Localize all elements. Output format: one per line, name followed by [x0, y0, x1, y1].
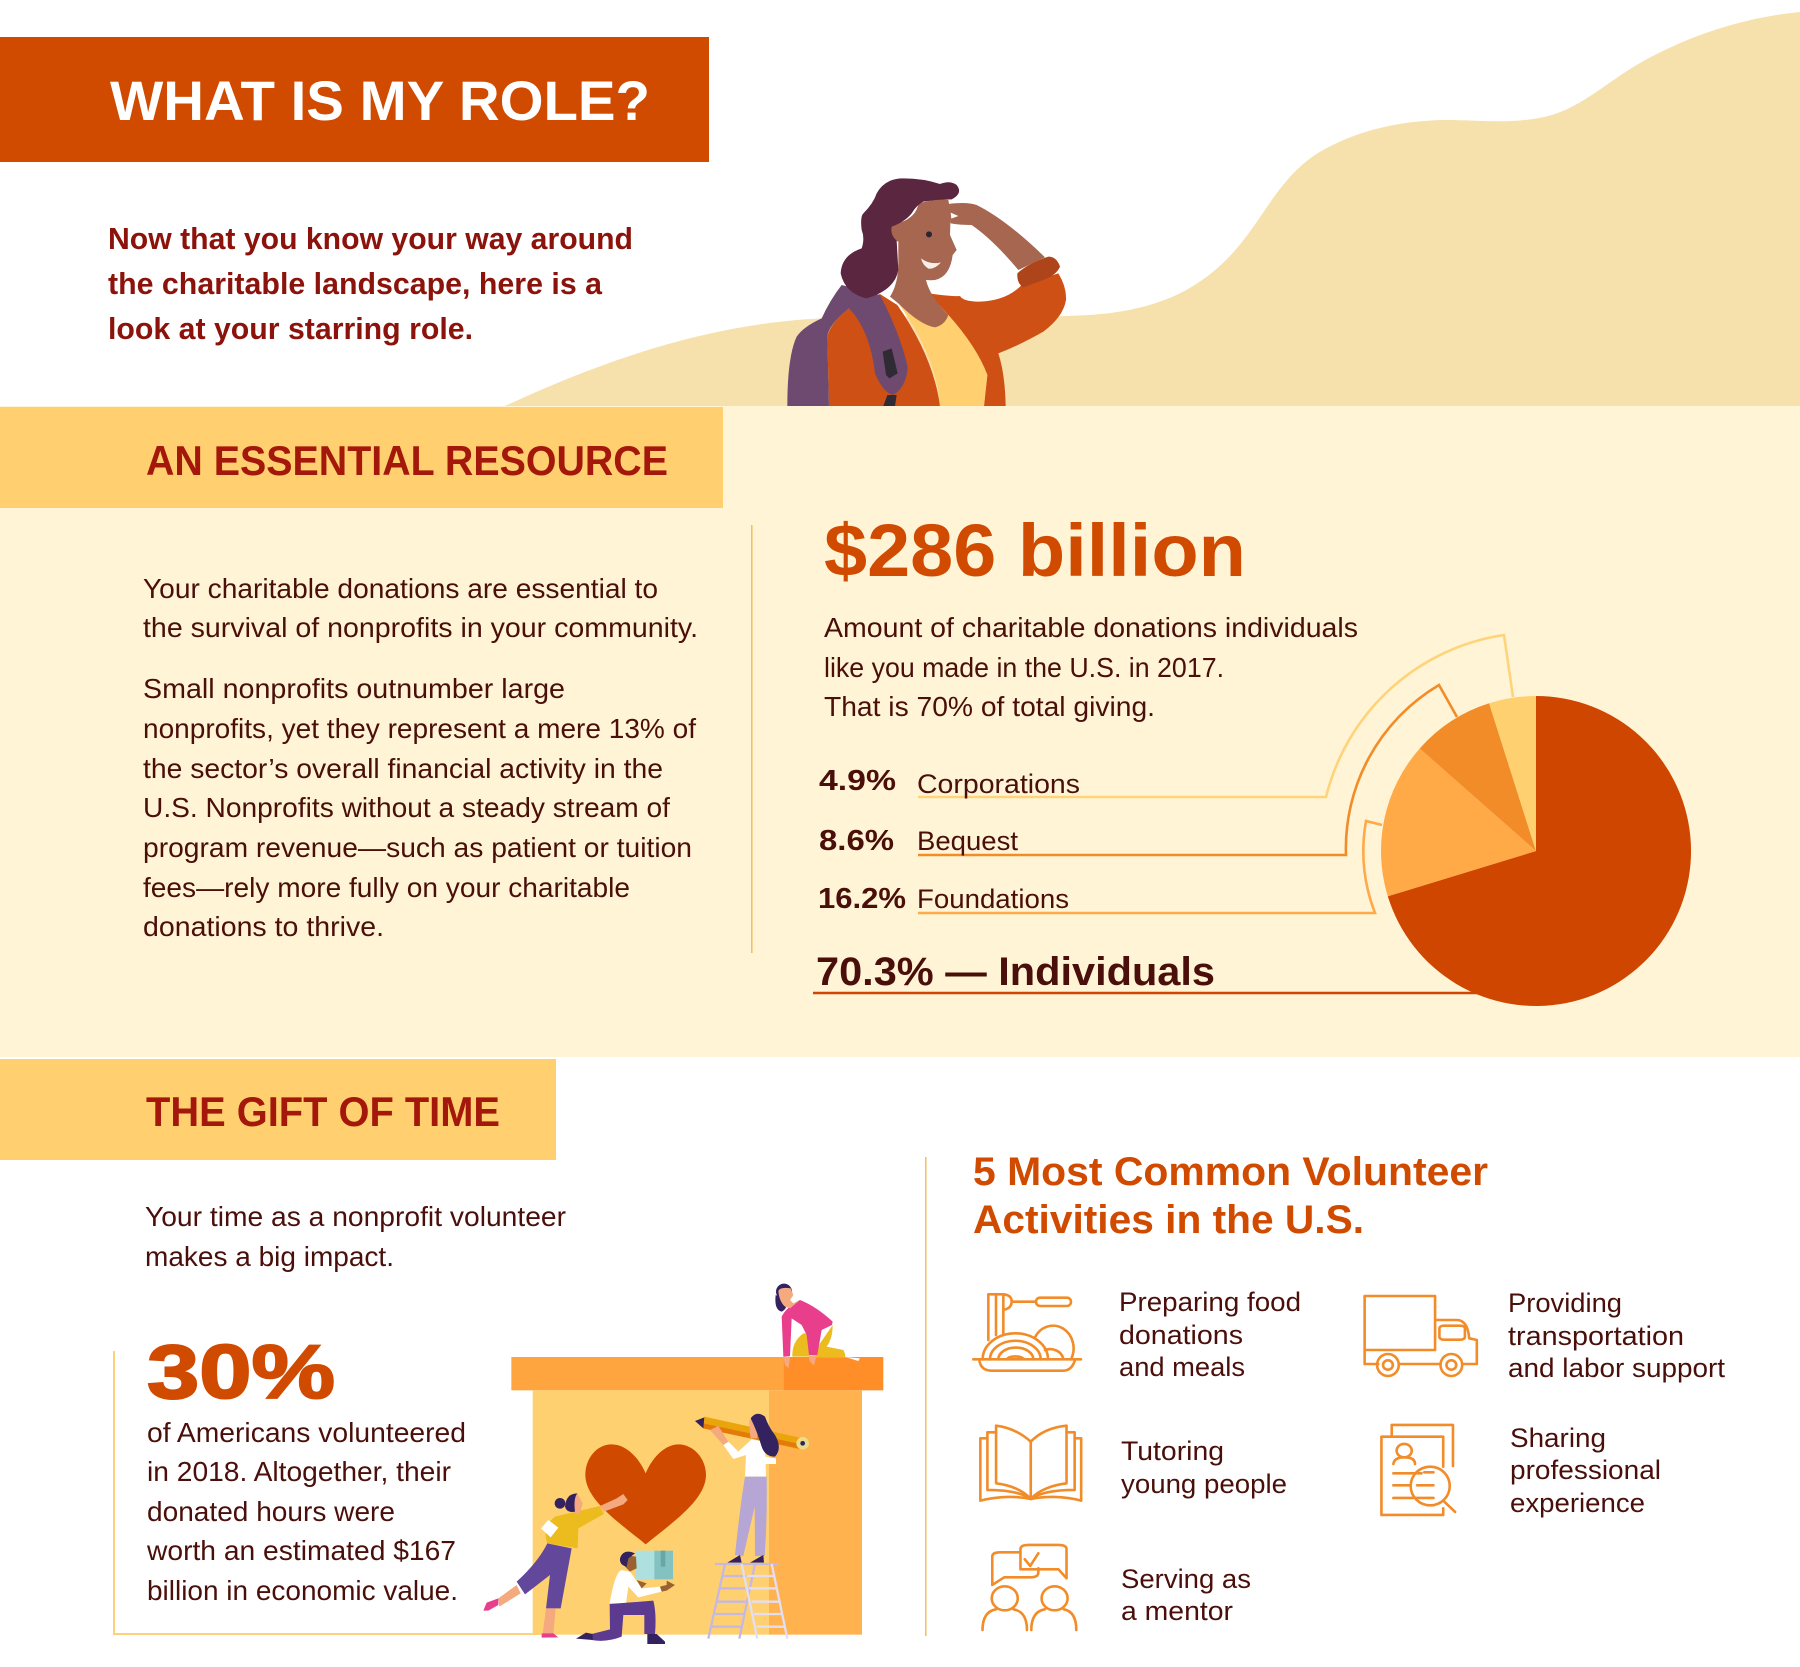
woman with pencil on ladder [695, 1414, 809, 1563]
intro text: look at your starring role. [108, 311, 473, 346]
illustration: volunteers building a giving box [483, 1284, 883, 1644]
label: sharing experience [1510, 1423, 1661, 1518]
label: providing transportation: Providing [1508, 1288, 1622, 1318]
legend: corporations: 4.9% [819, 765, 896, 797]
label: sharing experience: experience [1510, 1488, 1645, 1518]
section header: an essential resource: AN ESSENTIAL RESOURCE [146, 437, 668, 484]
label: preparing food: donations [1119, 1320, 1243, 1350]
section header: the gift of time [0, 1059, 556, 1160]
heading: volunteer activities [973, 1150, 1488, 1242]
label: serving as a mentor: Serving as [1121, 1564, 1251, 1594]
text: volunteer intro: Your time as a nonprofit volunteer [145, 1201, 566, 1232]
title banner [0, 37, 709, 162]
big number: 30%: 30% [147, 1330, 335, 1415]
legend: foundations [818, 883, 1069, 915]
intro text [108, 221, 633, 346]
cream band [0, 406, 1800, 1057]
section header: the gift of time: THE GIFT OF TIME [146, 1088, 500, 1135]
legend: bequest: Bequest [917, 826, 1019, 856]
text: volunteer statistic [146, 1417, 466, 1606]
legend: foundations: Foundations [917, 884, 1069, 914]
body text: essential resource: donations to thrive. [143, 911, 384, 942]
label: preparing food: Preparing food [1119, 1287, 1301, 1317]
text: volunteer intro [145, 1201, 566, 1272]
text: volunteer statistic: in 2018. Altogether, their [147, 1456, 451, 1487]
text: amount description [824, 612, 1358, 722]
label: preparing food: and meals [1119, 1352, 1245, 1382]
legend: foundations: 16.2% [818, 883, 906, 915]
background hill [505, 12, 1800, 407]
text: volunteer statistic: billion in economic value. [147, 1575, 458, 1606]
label: sharing experience: Sharing [1510, 1423, 1606, 1453]
body text: essential resource: Your charitable donations are essential to [143, 573, 658, 604]
intro text: the charitable landscape, here is a [108, 266, 603, 301]
title banner: WHAT IS MY ROLE? [110, 69, 650, 132]
body text: essential resource: nonprofits, yet they represent a mere 13% of [143, 713, 696, 744]
label: providing transportation: and labor support [1508, 1353, 1726, 1383]
label: preparing food [1119, 1287, 1301, 1382]
heading: volunteer activities: Activities in the U.S. [973, 1198, 1364, 1242]
label: serving as a mentor: a mentor [1121, 1596, 1233, 1626]
woman reaching for heart [483, 1493, 628, 1638]
icon: open book [980, 1426, 1081, 1501]
woman on the roof [775, 1284, 860, 1368]
body text: essential resource [143, 573, 698, 942]
legend: individuals: 70.3% — Individuals [816, 950, 1215, 994]
label: providing transportation: transportation [1508, 1321, 1684, 1351]
legend: corporations [819, 765, 1080, 799]
label: sharing experience: professional [1510, 1455, 1661, 1485]
text: volunteer intro: makes a big impact. [145, 1241, 394, 1272]
heading: volunteer activities: 5 Most Common Volunteer [973, 1150, 1488, 1194]
icon: mentor conversation [983, 1545, 1076, 1630]
section header: an essential resource [0, 407, 723, 508]
label: tutoring: Tutoring [1121, 1436, 1224, 1466]
text: amount description: Amount of charitable donations individuals [824, 612, 1358, 643]
text: volunteer statistic: of Americans volunteered [147, 1417, 466, 1448]
icon: delivery truck [1365, 1296, 1477, 1376]
body text: essential resource: the survival of nonprofits in your community. [143, 612, 698, 643]
legend: bequest: 8.6% [819, 825, 894, 857]
label: providing transportation [1508, 1288, 1726, 1383]
body text: essential resource: fees—rely more fully on your charitable [143, 872, 630, 903]
legend: bequest [819, 825, 1019, 857]
text: amount description: That is 70% of total giving. [824, 691, 1155, 722]
pie chart with leader lines [813, 635, 1691, 1006]
body text: essential resource: U.S. Nonprofits without a steady stream of [143, 792, 670, 823]
icon: bowl of noodles [973, 1294, 1081, 1371]
big number: $286 billion: $286 billion [824, 509, 1246, 592]
text: volunteer statistic: worth an estimated $167 [146, 1535, 456, 1566]
ladder [708, 1564, 787, 1639]
label: serving as a mentor [1121, 1564, 1251, 1626]
body text: essential resource: Small nonprofits outnumber large [143, 673, 565, 704]
icon: document with magnifier [1381, 1425, 1455, 1515]
text: amount description: like you made in the U.S. in 2017. [824, 652, 1224, 683]
kneeling man with box [576, 1551, 675, 1644]
text: volunteer statistic: donated hours were [147, 1496, 395, 1527]
label: tutoring: young people [1121, 1469, 1287, 1499]
legend: corporations: Corporations [917, 769, 1080, 799]
label: tutoring [1121, 1436, 1287, 1499]
body text: essential resource: the sector’s overall financial activity in the [143, 753, 663, 784]
body text: essential resource: program revenue—such as patient or tuition [143, 832, 692, 863]
illustration: woman shading her eyes [787, 178, 1066, 406]
intro text: Now that you know your way around [108, 221, 633, 256]
